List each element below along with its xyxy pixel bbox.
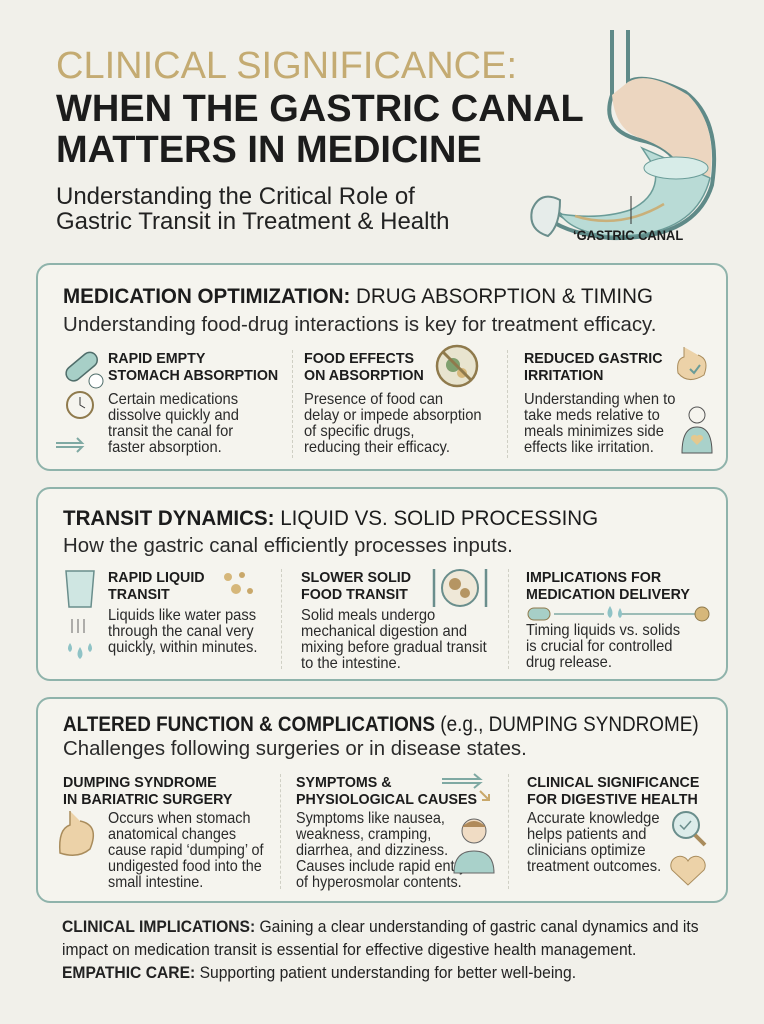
heading: ALTERED FUNCTION & COMPLICATIONS (e.g., DUMPING SYNDROME) — [63, 713, 699, 736]
col2 body: weakness, cramping, — [296, 826, 431, 843]
col1 body: Occurs when stomach — [108, 810, 250, 827]
col1 body: Liquids like water pass — [108, 607, 256, 624]
icon: stopwatch — [56, 391, 94, 453]
col2 body: mixing before gradual transit — [301, 639, 487, 656]
title: CLINICAL SIGNIFICANCE: — [56, 45, 517, 87]
col1 body: through the canal very — [108, 623, 254, 640]
col2 body — [296, 810, 466, 891]
col3 body: drug release. — [526, 654, 612, 671]
icon: pill — [65, 352, 104, 388]
col2 body: diarrhea, and dizziness. — [296, 842, 448, 859]
col1 body: small intestine. — [108, 874, 203, 891]
col3 title: FOR DIGESTIVE HEALTH — [527, 791, 698, 808]
col1 title: TRANSIT — [108, 586, 170, 603]
col2 body: of hyperosmolar contents. — [296, 874, 462, 891]
label: gastric canal: ‘GASTRIC CANAL — [573, 227, 683, 243]
col3 title: REDUCED GASTRIC — [524, 350, 663, 367]
col1 body: quickly, within minutes. — [108, 639, 257, 656]
col1 title — [108, 569, 205, 603]
icon: person heart — [682, 406, 712, 454]
subheading: How the gastric canal efficiently processes inputs. — [63, 535, 513, 557]
col3 title — [524, 350, 663, 384]
col3 body: Understanding when to — [524, 391, 675, 408]
col2 title — [301, 569, 411, 603]
col1 title — [108, 350, 278, 384]
col3 body: helps patients and — [527, 826, 646, 843]
col1 body: Certain medications — [108, 391, 238, 408]
footer: clinical implications — [62, 917, 699, 959]
icon: stomach check — [677, 347, 706, 380]
col3 body: effects like irritation. — [524, 439, 654, 456]
panel: altered function — [36, 697, 728, 903]
footer: clinical implications: CLINICAL IMPLICATIONS: Gaining a clear understanding of gastric canal dynamics and its — [62, 917, 699, 936]
col1 body — [108, 810, 264, 891]
col2 title: PHYSIOLOGICAL CAUSES — [296, 791, 477, 808]
col1 title: STOMACH ABSORPTION — [108, 367, 278, 384]
col1 title — [63, 774, 232, 808]
col3 body — [526, 622, 680, 671]
subtitle — [56, 183, 449, 235]
icon: particles — [224, 572, 253, 594]
col3 title: IRRITATION — [524, 367, 603, 384]
title — [56, 45, 584, 171]
col3 body: clinicians optimize — [527, 842, 646, 859]
col3 title — [527, 774, 699, 808]
subheading: Challenges following surgeries or in disease states. — [63, 738, 527, 760]
title: WHEN THE GASTRIC CANAL — [56, 88, 584, 130]
icon: sick person — [454, 818, 494, 874]
col1 body: dissolve quickly and — [108, 407, 239, 424]
panel: medication optimization — [36, 263, 728, 471]
footer: clinical implications: impact on medication transit is essential for effective digestive health management. — [62, 940, 636, 959]
heading: MEDICATION OPTIMIZATION: DRUG ABSORPTION & TIMING — [63, 285, 653, 308]
col2 title: SLOWER SOLID — [301, 569, 411, 586]
col1 body — [108, 607, 257, 656]
col2 title — [296, 774, 477, 808]
footer: empathic care: EMPATHIC CARE: Supporting patient understanding for better well-being. — [62, 963, 576, 982]
col2 body: delay or impede absorption — [304, 407, 482, 424]
col2 title: SYMPTOMS & — [296, 774, 392, 791]
col3 body: treatment outcomes. — [527, 858, 661, 875]
col2 body: Presence of food can — [304, 391, 443, 408]
col3 title: IMPLICATIONS FOR — [526, 569, 661, 586]
col1 body: anatomical changes — [108, 826, 236, 843]
col2 title: FOOD TRANSIT — [301, 586, 408, 603]
subheading: Understanding food-drug interactions is key for treatment efficacy. — [63, 314, 656, 336]
icon: water glass — [65, 570, 95, 659]
col2 body: to the intestine. — [301, 655, 401, 672]
col2 body: Causes include rapid entry — [296, 858, 466, 875]
panel: transit dynamics — [36, 487, 728, 681]
col1 title: RAPID LIQUID — [108, 569, 205, 586]
illustration: stomach — [530, 30, 716, 240]
subtitle: Understanding the Critical Role of — [56, 183, 415, 210]
col1 body: undigested food into the — [108, 858, 262, 875]
col1 title: DUMPING SYNDROME — [63, 774, 217, 791]
col2 body — [301, 607, 487, 672]
col1 body: transit the canal for — [108, 423, 233, 440]
col1 body: faster absorption. — [108, 439, 222, 456]
heading: TRANSIT DYNAMICS: LIQUID VS. SOLID PROCESSING — [63, 507, 598, 530]
icon: arrows — [442, 773, 490, 801]
col1 body: cause rapid ‘dumping’ of — [108, 842, 264, 859]
col2 body: Solid meals undergo — [301, 607, 435, 624]
col3 body: take meds relative to — [524, 407, 660, 424]
col3 body — [524, 391, 675, 456]
col3 body: is crucial for controlled — [526, 638, 672, 655]
col2 body: of specific drugs, — [304, 423, 414, 440]
col3 body: Accurate knowledge — [527, 810, 660, 827]
col2 body — [304, 391, 482, 456]
subtitle: Gastric Transit in Treatment & Health — [56, 208, 449, 235]
col2 body: Symptoms like nausea, — [296, 810, 445, 827]
col2 title: FOOD EFFECTS — [304, 350, 414, 367]
col2 title — [304, 350, 424, 384]
icon: stomach — [59, 811, 94, 856]
icon: no food — [436, 344, 478, 388]
col2 body: reducing their efficacy. — [304, 439, 450, 456]
col3 body: Timing liquids vs. solids — [526, 622, 680, 639]
col1 title: RAPID EMPTY — [108, 350, 205, 367]
title: MATTERS IN MEDICINE — [56, 129, 482, 171]
col1 body — [108, 391, 239, 456]
col1 title: IN BARIATRIC SURGERY — [63, 791, 232, 808]
col2 title: ON ABSORPTION — [304, 367, 424, 384]
icon: magnifier and heart — [670, 811, 706, 886]
icon: plate — [432, 569, 488, 607]
col3 title: MEDICATION DELIVERY — [526, 586, 690, 603]
col3 title — [526, 569, 690, 603]
col3 body: meals minimizes side — [524, 423, 664, 440]
col3 title: CLINICAL SIGNIFICANCE — [527, 774, 699, 791]
col3 body — [527, 810, 661, 875]
col2 body: mechanical digestion and — [301, 623, 467, 640]
icon: drops arrow — [528, 606, 710, 622]
